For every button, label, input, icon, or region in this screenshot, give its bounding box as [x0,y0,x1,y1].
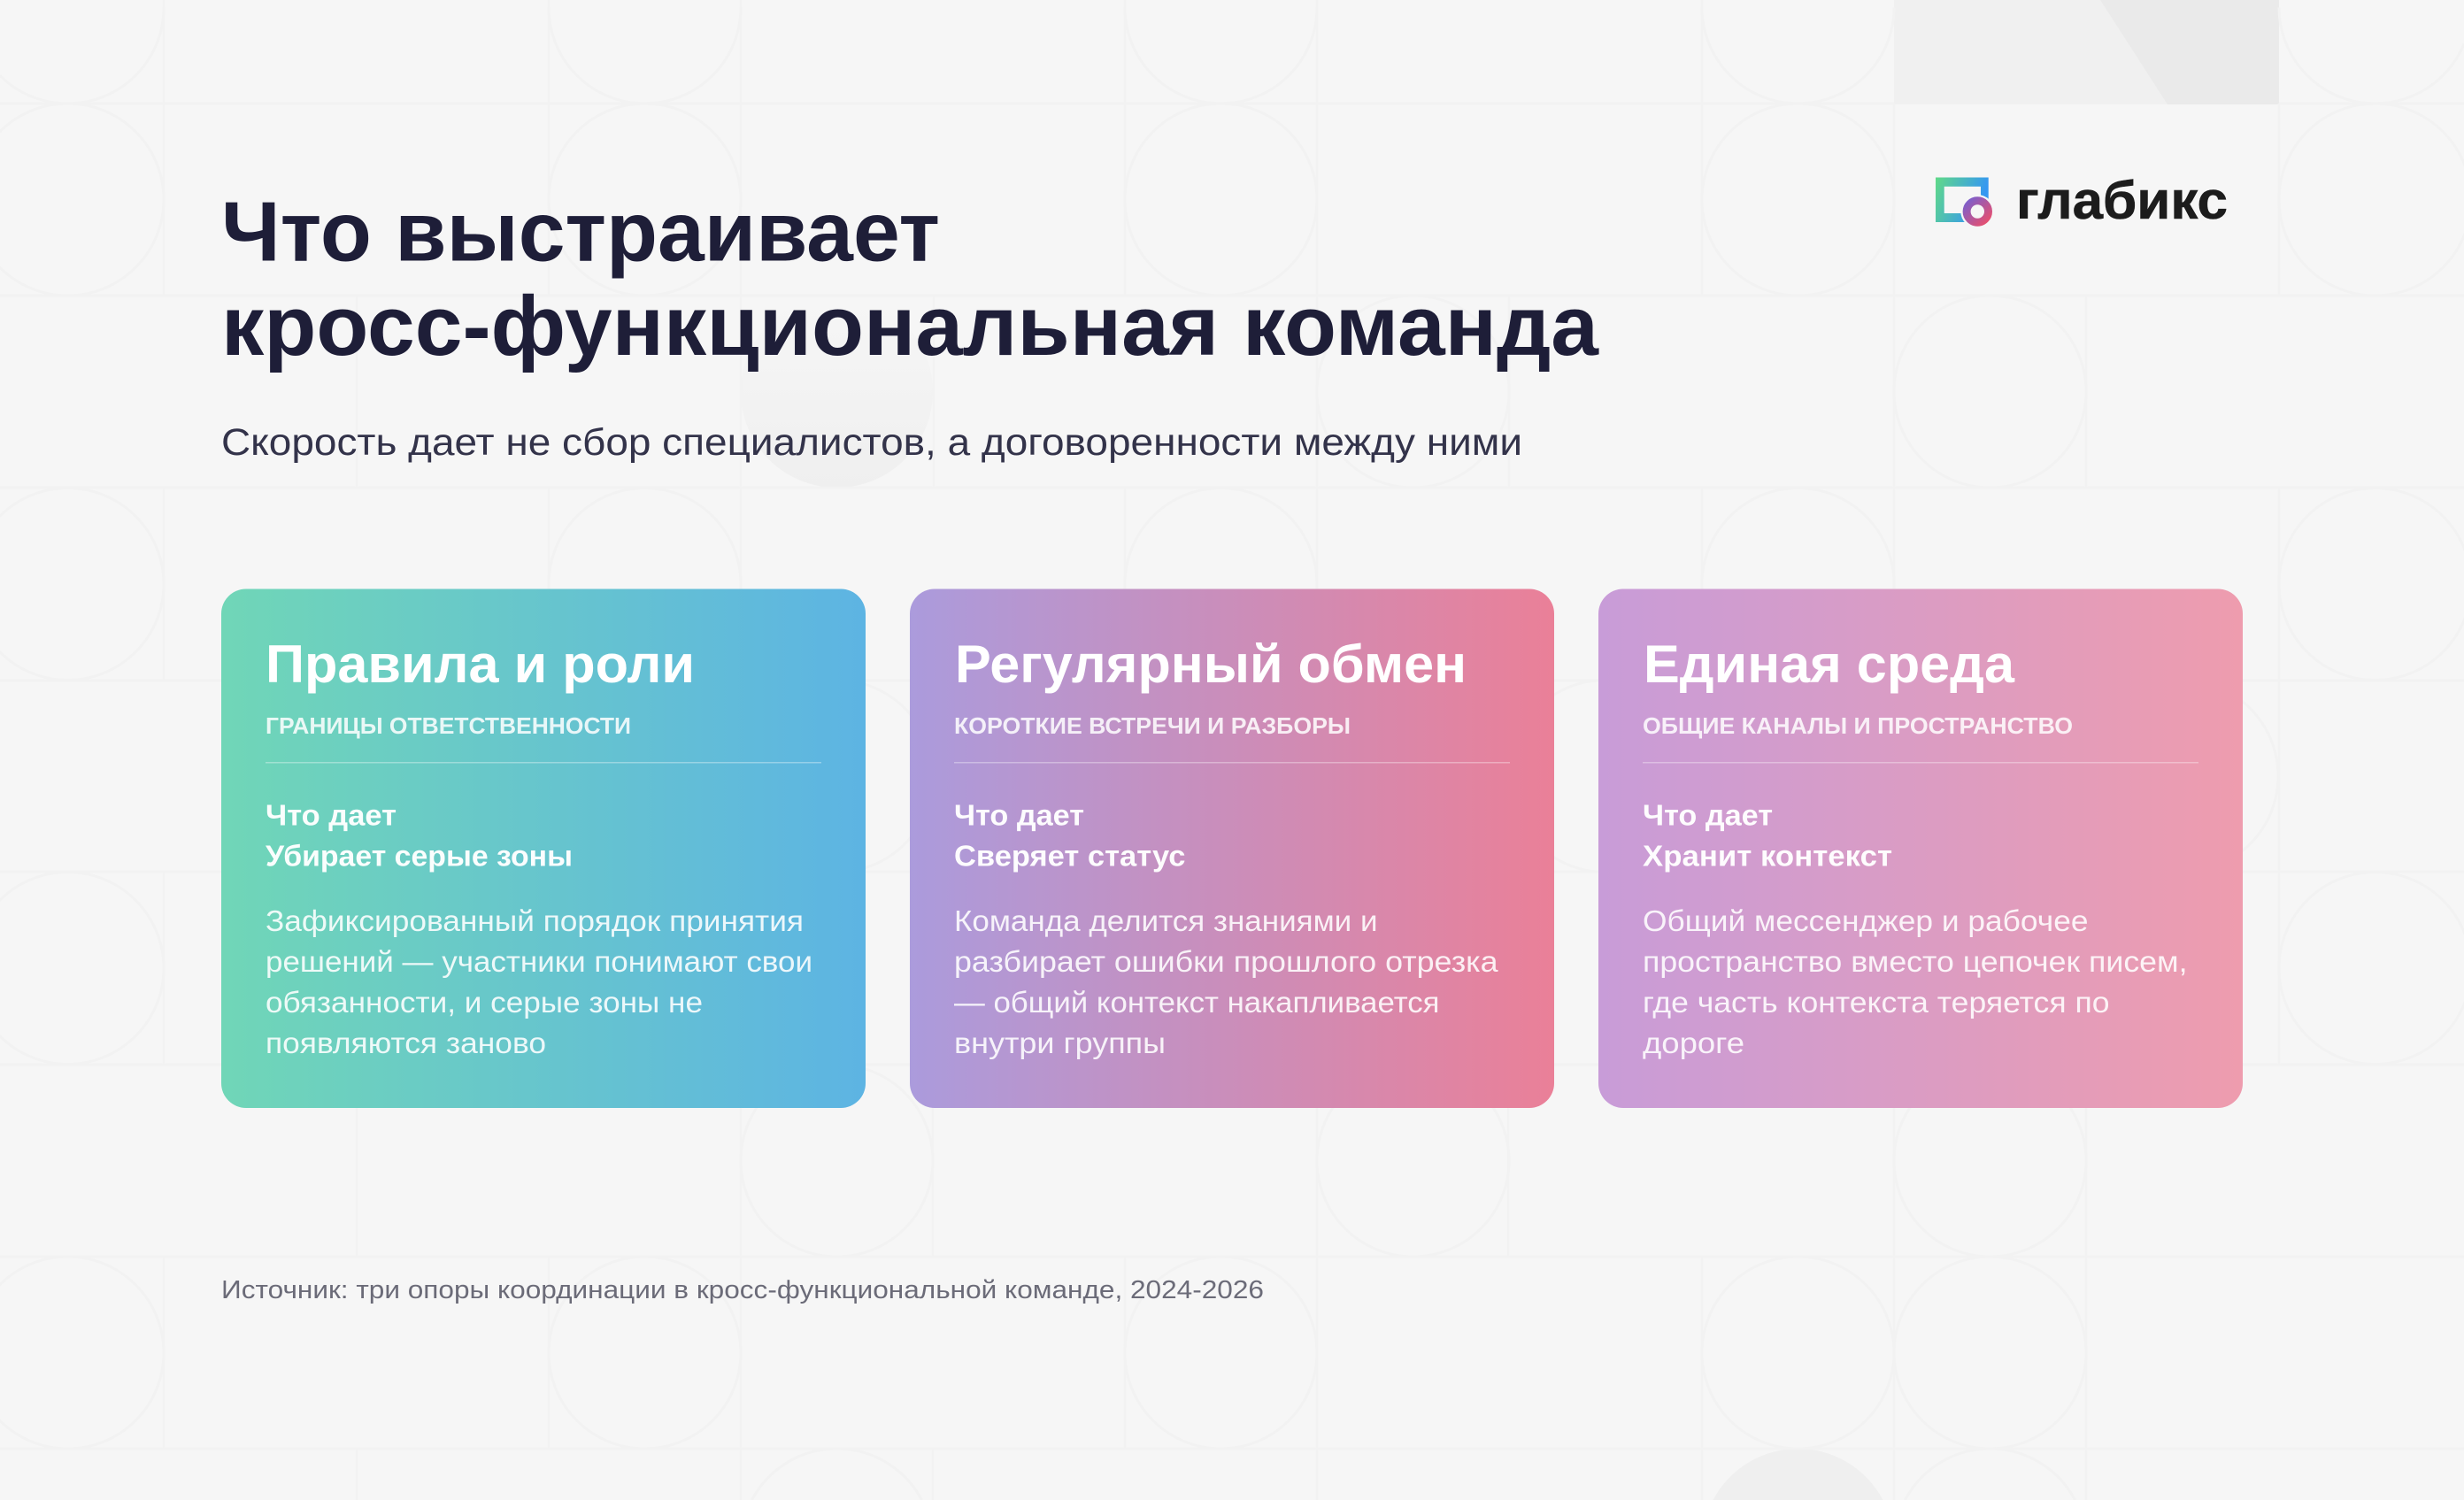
description text: пространство вместо цепочек писем, [1643,945,2188,978]
benefit text [1643,798,1892,873]
benefit text: Убирает серые зоны [266,839,573,873]
description text: где часть контекста теряется по [1643,986,2110,1019]
title: Что выстраивает [221,184,940,280]
icon: logo mark [1936,177,1994,228]
description text: дороге [1643,1027,1744,1059]
description text: — общий контекст накапливается [954,986,1439,1019]
title [221,184,1599,373]
description text: обязанности, и серые зоны не [266,986,703,1019]
subtitle: Скорость дает не сбор специалистов, а договоренности между ними [221,421,1522,464]
panel: regular exchange [910,589,1554,1108]
benefit text: Что дает [954,798,1084,832]
description text: Общий мессенджер и рабочее [1643,904,2089,937]
panel: shared environment [1598,589,2243,1108]
description text [266,904,812,1059]
description text [954,904,1498,1059]
description text: внутри группы [954,1027,1166,1059]
description text: решений — участники понимают свои [266,945,812,978]
logo wordmark: глабикс [2016,171,2228,230]
card subheading: ГРАНИЦЫ ОТВЕТСТВЕННОСТИ [266,712,631,739]
benefit text: Сверяет статус [954,839,1186,873]
description text: Команда делится знаниями и [954,904,1377,937]
description text [1643,904,2188,1059]
logo [1936,171,2228,230]
description text: Зафиксированный порядок принятия [266,904,804,937]
benefit text [954,798,1186,873]
benefit text [266,798,573,873]
description text: появляются заново [266,1027,546,1059]
source note: Источник: три опоры координации в кросс-функциональной команде, 2024-2026 [221,1276,1264,1304]
card heading: Правила и роли [266,635,695,694]
benefit text: Что дает [1643,798,1773,832]
card subheading: КОРОТКИЕ ВСТРЕЧИ И РАЗБОРЫ [954,712,1351,739]
card heading: Регулярный обмен [955,635,1467,694]
title: кросс-функциональная команда [221,279,1599,373]
panel: rules and roles [221,589,866,1108]
benefit text: Хранит контекст [1643,839,1892,873]
card subheading: ОБЩИЕ КАНАЛЫ И ПРОСТРАНСТВО [1643,712,2073,739]
description text: разбирает ошибки прошлого отрезка [954,945,1498,978]
card heading: Единая среда [1644,635,2015,694]
benefit text: Что дает [266,798,397,832]
